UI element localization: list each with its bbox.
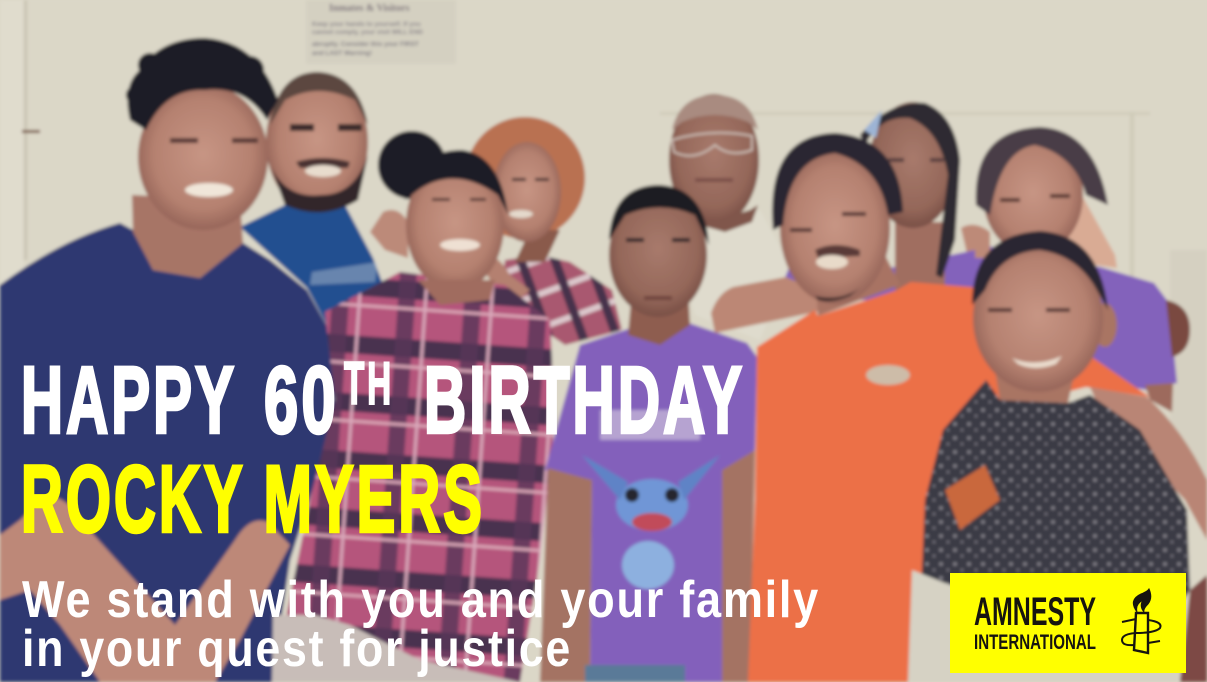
message text: in your quest for justice (22, 620, 572, 678)
message text (22, 571, 820, 678)
headline: Happy 60th Birthday: HAPPY (21, 348, 237, 454)
wall notice: Inmates & Visitors: cannot comply, your visit WILL END (312, 29, 423, 36)
person: older man with glasses, white shirt (669, 94, 790, 340)
person: woman with red curly hair (465, 117, 622, 345)
person: boy in speckled sweatshirt, front right (908, 231, 1207, 682)
name: Rocky Myers: ROCKY MYERS (21, 446, 485, 552)
logo wordmark: INTERNATIONAL (974, 631, 1096, 654)
wall notice: Inmates & Visitors: Inmates & Visitors (329, 3, 410, 14)
logo wordmark: AMNESTY (974, 590, 1096, 634)
person: man in blue shirt (240, 72, 385, 340)
person: man in orange shirt (711, 133, 1150, 682)
person: young man at left, navy shirt (0, 38, 335, 682)
wall notice: Inmates & Visitors (306, 0, 456, 64)
message text: We stand with you and your family (22, 571, 820, 629)
person: boy in purple Stitch t-shirt (540, 185, 757, 682)
person: girl with purple top, far right (945, 127, 1190, 412)
arms folded at bottom left (0, 497, 290, 682)
wall notice: Inmates & Visitors: Keep your hands to yourself. If you (312, 21, 421, 28)
wall notice: Inmates & Visitors: and LAST Warning! (312, 50, 372, 57)
person: woman in pink plaid shirt (272, 131, 555, 682)
icon: Stitch print (582, 410, 720, 589)
headline: Happy 60th Birthday: BIRTHDAY (424, 348, 745, 454)
logo: Amnesty International (950, 573, 1186, 673)
headline: Happy 60th Birthday (21, 348, 745, 454)
person: woman with braids, back right (772, 102, 975, 300)
logo wordmark (974, 590, 1096, 654)
icon: candle in barbed wire (1122, 589, 1160, 653)
headline: Happy 60th Birthday: 60 (264, 348, 339, 454)
wall notice: Inmates & Visitors: abruptly. Consider this your FIRST (312, 41, 419, 48)
headline: Happy 60th Birthday: TH (344, 350, 394, 417)
